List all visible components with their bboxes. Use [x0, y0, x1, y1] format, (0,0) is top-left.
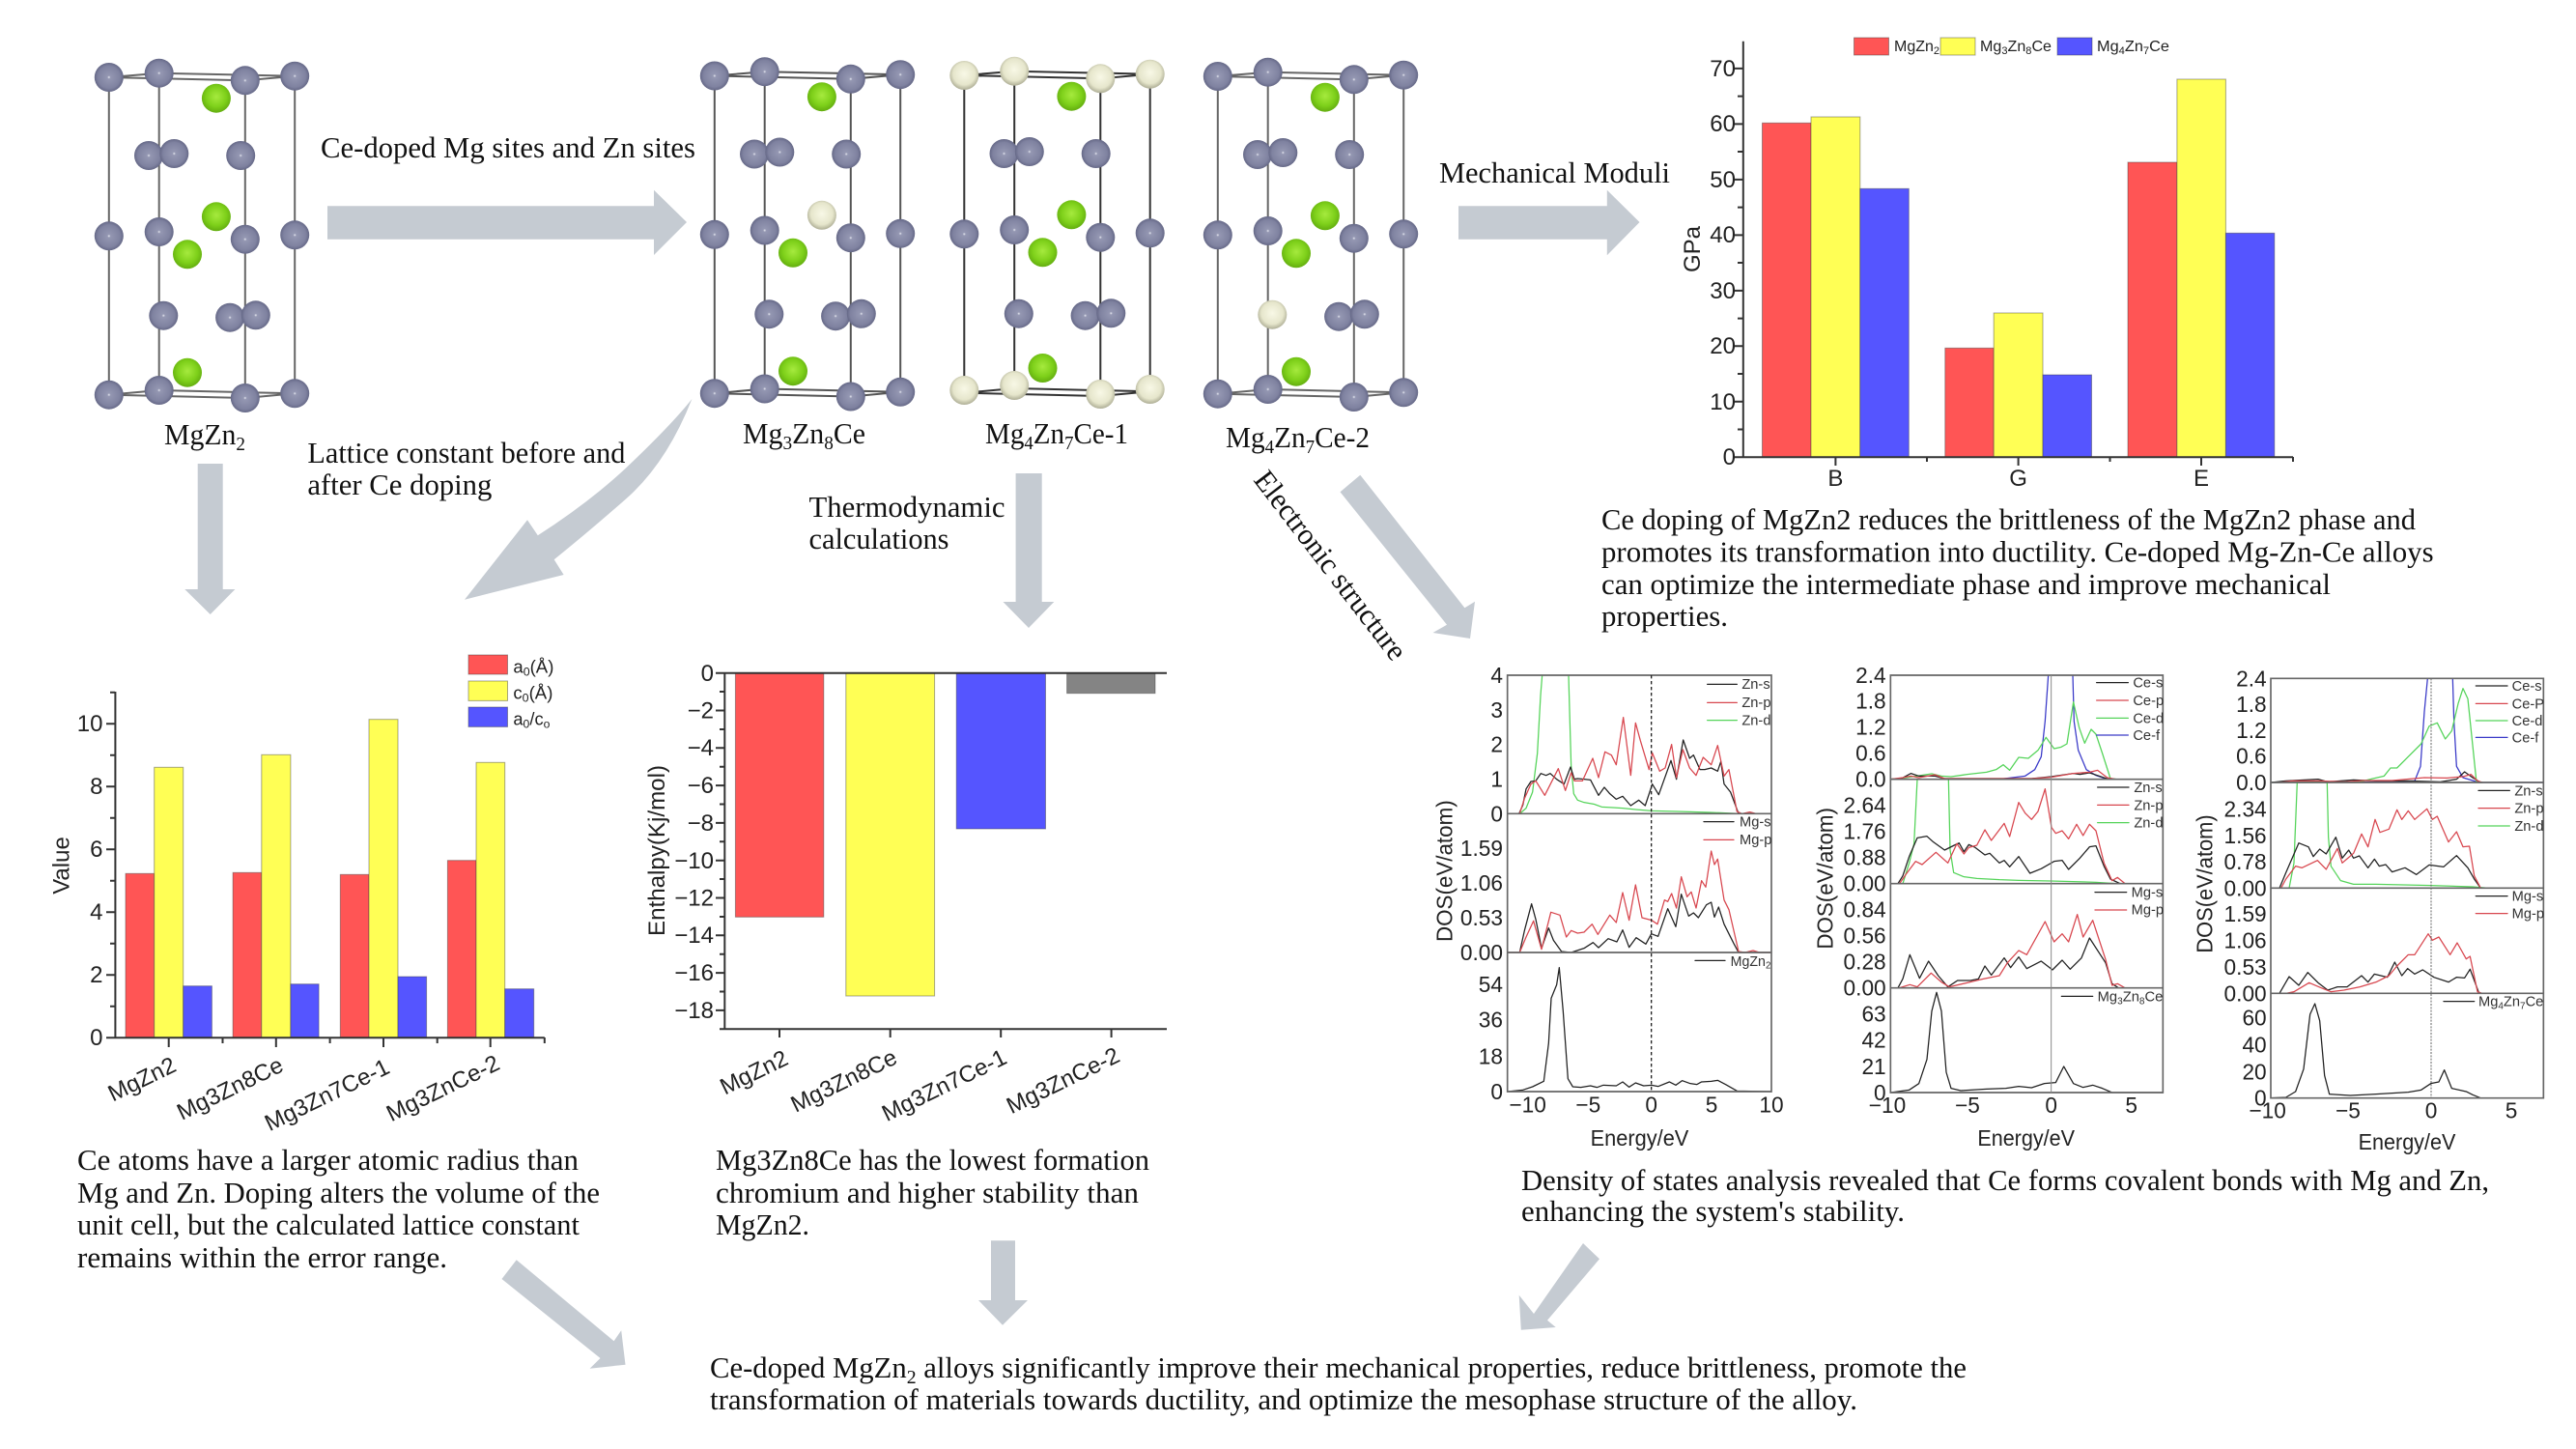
axes [716, 673, 1167, 1037]
y tick labels: 36 [1479, 1008, 1503, 1033]
y tick labels: 18 [1479, 1043, 1503, 1068]
y tick labels: 2 [1490, 732, 1503, 757]
panel curve: total [1508, 968, 1771, 1092]
legends: Zn [2504, 995, 2520, 1010]
text block: enthalpy conclusion [716, 1143, 1149, 1241]
x tick labels: E [2194, 466, 2209, 492]
DOS chart: MgZn2 [1431, 663, 1784, 1151]
bars [735, 673, 1155, 996]
x tick labels [1869, 1093, 2137, 1118]
y tick labels: 0.88 [1844, 844, 1886, 869]
text block: overall conclusion: alloys significantly improve their mechanical properties, reduce brittleness, promote the [917, 1350, 1967, 1384]
arrow: DOS text to conclusion [1519, 1243, 1599, 1330]
arrow: diagonal to DOS charts [1341, 475, 1475, 639]
label: Mg3Zn8Ce: Zn [792, 416, 825, 450]
legends: Mg-p [1740, 833, 1771, 848]
caption: lattice constant: after Ce doping [307, 468, 492, 501]
axes [106, 692, 545, 1047]
label: MgZn2: MgZn [164, 417, 240, 451]
text block: enthalpy conclusion: Mg3Zn8Ce has the lowest formation [716, 1143, 1149, 1177]
text block: density of states: Density of states analysis revealed that Ce forms covalent bonds with Mg and Zn, [1521, 1163, 2489, 1197]
x tick labels: Mg3Zn7Ce-1 [878, 1044, 1011, 1127]
label: Mg4Zn7Ce-1: 4 [1024, 433, 1033, 454]
legend: Mg [1980, 39, 2001, 55]
y tick labels: 1.56 [2224, 823, 2267, 848]
y tick labels: 1.8 [2236, 692, 2267, 717]
y tick labels: 1.2 [1855, 715, 1886, 740]
legend: (Å) [530, 657, 553, 676]
label: Mg4Zn7Ce-1: Zn [1033, 416, 1065, 450]
text block: lattice conclusion: Ce atoms have a larger atomic radius than [77, 1143, 579, 1177]
text block: mechanical conclusion: Ce doping of MgZn2 reduces the brittleness of the MgZn2 phase and [1601, 502, 2416, 536]
legends: Ce-P [2512, 696, 2544, 712]
y tick labels: 2 [90, 962, 102, 988]
panel curves: Mg [2279, 934, 2482, 993]
y tick labels: 0.00 [1844, 976, 1886, 1001]
y tick labels: 20 [1710, 333, 1736, 359]
legend [468, 655, 553, 730]
x tick labels: 5 [1706, 1092, 1717, 1117]
y axis title: DOS(eV/atom) [2193, 814, 2218, 953]
label: Mg4Zn7Ce-2: 7 [1306, 437, 1315, 458]
legends: Zn-s [2134, 781, 2163, 796]
x tick labels: 5 [2505, 1097, 2517, 1122]
y axis title: Enthalpy(Kj/mol) [644, 765, 670, 936]
Fermi level [2429, 678, 2432, 1098]
caption: thermodynamic calculations: calculations [809, 522, 948, 555]
crystal structure: Mg4Zn7Ce-1 [949, 57, 1165, 409]
legend: (Å) [529, 684, 552, 703]
x tick labels: Mg3Zn7Ce-1 [261, 1054, 394, 1137]
y tick labels: 0 [90, 1025, 102, 1051]
label: Mg4Zn7Ce-1: Mg [985, 416, 1027, 450]
x tick labels [104, 1050, 504, 1137]
x tick labels: −5 [1955, 1093, 1980, 1118]
x tick labels [1509, 1092, 1784, 1117]
crystal structure: Mg3Zn8Ce [700, 57, 915, 411]
x tick labels: Mg3ZnCe-2 [382, 1050, 504, 1127]
y tick labels: 1.76 [1844, 818, 1886, 843]
legend: Zn [2125, 39, 2143, 55]
legend: 0 [524, 665, 530, 678]
y tick labels: −18 [674, 998, 714, 1024]
y tick labels: 0.00 [1844, 871, 1886, 896]
crystal structure: MgZn2 [95, 59, 309, 412]
legends: Zn-d [2134, 816, 2163, 832]
x tick labels: Mg3Zn8Ce [787, 1044, 901, 1118]
label: Mg3Zn8Ce: 3 [782, 433, 792, 454]
text block: mechanical conclusion [1601, 502, 2434, 633]
y tick labels: 0.6 [1855, 740, 1886, 765]
legend: Ce [2031, 39, 2052, 55]
y tick labels: 42 [1861, 1028, 1886, 1053]
legend: 2 [1934, 45, 1939, 57]
legends: 7 [2520, 1001, 2526, 1011]
y tick labels [2224, 666, 2267, 1111]
y tick labels: 2.4 [2236, 666, 2267, 691]
bars: Mg3ZnCe-2 [447, 762, 534, 1037]
label: Mg3Zn8Ce: Ce [834, 416, 865, 450]
text block: mechanical conclusion: properties. [1601, 599, 1728, 633]
panel curves: Zn [2271, 782, 2543, 888]
panel curves: Mg [1508, 851, 1771, 952]
x axis title: Energy/eV [2359, 1129, 2456, 1154]
label: Mg3Zn8Ce: Mg [743, 416, 784, 450]
text block: lattice conclusion: remains within the error range. [77, 1240, 447, 1274]
legends: MgZn [1731, 954, 1767, 970]
frame [1890, 675, 2163, 1093]
y tick labels: −12 [674, 885, 714, 912]
y tick labels: 0 [1723, 444, 1736, 470]
frame [1508, 675, 1771, 1092]
y tick labels: −8 [688, 810, 714, 837]
bars: G [1945, 313, 2092, 457]
bar chart: lattice constants [48, 655, 553, 1137]
legends: Ce-f [2512, 730, 2539, 746]
axes [1734, 42, 2293, 466]
legend: 4 [2119, 45, 2125, 57]
caption: lattice constant [307, 436, 626, 501]
panel curves: Zn [1890, 780, 2163, 884]
legends: 3 [2117, 996, 2123, 1007]
y tick labels: 4 [90, 899, 102, 925]
y tick labels: 1 [1490, 767, 1503, 792]
frame [2271, 678, 2543, 1098]
label: Mg4Zn7Ce-2: 4 [1265, 437, 1274, 458]
label: Mg4Zn7Ce-2: Mg [1226, 420, 1267, 454]
y tick labels: 0.00 [2224, 980, 2267, 1006]
x tick labels: −5 [1575, 1092, 1600, 1117]
x tick labels: −5 [2335, 1097, 2361, 1122]
y tick labels [1460, 663, 1503, 1104]
arrow: to doped structures [327, 190, 687, 255]
text block: enthalpy conclusion: MgZn2. [716, 1208, 809, 1241]
y axis title: GPa [1680, 225, 1706, 272]
caption: lattice constant: Lattice constant before and [307, 436, 626, 469]
arrow: down to enthalpy chart [1003, 473, 1054, 628]
y tick labels: 1.59 [1460, 836, 1503, 861]
x tick labels: Mg3ZnCe-2 [1003, 1042, 1124, 1120]
legend: 8 [2025, 45, 2031, 57]
panel curves: Ce [2271, 678, 2543, 782]
legends: Zn [2123, 990, 2139, 1006]
caption: mechanical moduli: Mechanical Moduli [1439, 156, 1670, 189]
y tick labels: 1.8 [1855, 689, 1886, 714]
y tick labels: 30 [1710, 278, 1736, 304]
x tick labels: G [2009, 466, 2027, 492]
panel curves: Zn [1508, 675, 1771, 813]
legends: Zn-d [2514, 819, 2543, 835]
arrow: down from MgZn2 [184, 464, 235, 614]
legends [1695, 677, 1771, 972]
legend: 7 [2143, 45, 2149, 57]
bar chart: mechanical moduli [1680, 38, 2293, 492]
y tick labels: 0 [1874, 1080, 1886, 1105]
label: Mg4Zn7Ce-2: Ce-2 [1315, 420, 1370, 454]
arrow: lattice text to conclusion [502, 1260, 626, 1369]
arrow: enthalpy text to conclusion [978, 1240, 1028, 1325]
legends: 2 [1766, 961, 1771, 972]
bars: B [1762, 117, 1909, 457]
text block: lattice conclusion: Mg and Zn. Doping alters the volume of the [77, 1176, 600, 1209]
x tick labels: 10 [1759, 1092, 1784, 1117]
x tick labels: 0 [2045, 1093, 2057, 1118]
text block: mechanical conclusion: can optimize the intermediate phase and improve mechanical [1601, 567, 2331, 601]
y tick labels: 0.84 [1844, 896, 1886, 922]
y tick labels: 4 [1490, 663, 1503, 688]
legend: o [544, 717, 551, 730]
y axis title: DOS(eV/atom) [1431, 800, 1457, 942]
y tick labels: 0.78 [2224, 849, 2267, 874]
legends: Mg-s [1740, 814, 1771, 830]
legend: 0 [523, 692, 529, 705]
x axis title: Energy/eV [1591, 1125, 1689, 1151]
y tick labels: 0 [1490, 801, 1503, 826]
legends: Zn-p [2134, 798, 2163, 813]
y tick labels: 2.64 [1844, 792, 1886, 817]
legend: MgZn [1894, 39, 1934, 55]
y axis title: DOS(eV/atom) [1812, 808, 1837, 950]
bars: E [2128, 79, 2275, 457]
legends: 8 [2139, 996, 2145, 1007]
y tick labels: −2 [688, 697, 714, 724]
legend: Zn [2008, 39, 2025, 55]
arrow: curved to lattice chart [465, 399, 692, 600]
y tick labels: 0.0 [2236, 770, 2267, 795]
legend: Mg [2097, 39, 2118, 55]
y tick labels: 1.06 [2224, 927, 2267, 952]
y tick labels: 10 [1710, 389, 1736, 415]
label: Mg4Zn7Ce-1: Ce-1 [1073, 416, 1128, 450]
y tick labels: −6 [688, 773, 714, 799]
x tick labels: 0 [2425, 1097, 2437, 1122]
y tick labels: 2.34 [2224, 797, 2267, 822]
legends [2444, 679, 2544, 1011]
y tick labels: −10 [674, 848, 714, 874]
legends: Mg-p [2512, 906, 2544, 922]
legends: Zn-s [2514, 783, 2543, 799]
y tick labels: 54 [1479, 972, 1503, 997]
y tick labels: 0.28 [1844, 950, 1886, 975]
y tick labels: 20 [2242, 1059, 2267, 1084]
legend: a [513, 657, 523, 676]
y tick labels: −16 [674, 960, 714, 986]
crystal structure: Mg4Zn7Ce-2 [1203, 58, 1418, 412]
x tick labels: B [1827, 466, 1843, 492]
bar chart: enthalpy [644, 661, 1167, 1127]
label: Mg4Zn7Ce-2: Zn [1274, 420, 1306, 454]
text block: enthalpy conclusion: chromium and higher stability than [716, 1176, 1139, 1209]
text block: density of states [1521, 1163, 2489, 1228]
legends: Mg-s [2512, 889, 2543, 904]
caption: thermodynamic calculations: Thermodynamic [809, 490, 1005, 524]
legends: Mg [2478, 995, 2498, 1010]
panel curve: total [2271, 1004, 2543, 1098]
y tick labels: 0.00 [2224, 875, 2267, 900]
y tick labels: 1.2 [2236, 718, 2267, 743]
y tick labels: 0 [1490, 1079, 1503, 1104]
x tick labels: 5 [2125, 1093, 2137, 1118]
text block: overall conclusion: transformation of materials towards ductility, and optimize the mesophase structure of the alloy. [710, 1382, 1857, 1416]
text block: overall conclusion: Ce-doped MgZn [710, 1350, 909, 1384]
y tick labels: 0 [2254, 1086, 2267, 1111]
legends: Ce [2144, 990, 2163, 1006]
legend [1854, 38, 2169, 57]
legends: Zn-p [1741, 696, 1770, 711]
legends: Ce-p [2133, 694, 2164, 709]
y tick labels: 8 [90, 774, 102, 800]
y tick labels: 60 [1710, 111, 1736, 137]
text block: density of states: enhancing the system's stability. [1521, 1194, 1905, 1228]
y tick labels: 40 [1710, 222, 1736, 248]
x tick labels: −10 [1869, 1093, 1906, 1118]
legend: c [513, 684, 522, 703]
legends: Ce [2526, 995, 2543, 1010]
y tick labels: 21 [1861, 1054, 1886, 1079]
y tick labels: 63 [1861, 1001, 1886, 1026]
x tick labels [1827, 466, 2209, 492]
legend: Ce [2149, 39, 2169, 55]
y tick labels [1710, 56, 1736, 470]
DOS chart: Mg3Zn8Ce [1812, 663, 2164, 1151]
y tick labels: 0.56 [1844, 923, 1886, 948]
text block: lattice conclusion [77, 1143, 600, 1274]
legend: 0 [524, 717, 530, 730]
y axis title: Value [48, 837, 75, 895]
text block: overall conclusion: 2 [907, 1367, 917, 1388]
y tick labels: 6 [90, 837, 102, 863]
label: Mg3Zn8Ce: 8 [824, 433, 834, 454]
y tick labels: 0.00 [1460, 940, 1503, 965]
legends: Zn-s [1741, 677, 1770, 693]
legends: 4 [2498, 1001, 2504, 1011]
caption: electronic structure: Electronic structure [1247, 464, 1414, 667]
x tick labels: MgZn2 [716, 1045, 792, 1100]
legends: Ce-d [2133, 711, 2164, 726]
caption: Ce-doped sites: Ce-doped Mg sites and Zn sites [321, 130, 695, 164]
bars: Mg3Zn7Ce-1 [340, 720, 427, 1037]
x tick labels: 0 [1645, 1092, 1657, 1117]
y tick labels: 0.53 [2224, 954, 2267, 980]
legends: Ce-f [2133, 728, 2161, 744]
text block: lattice conclusion: unit cell, but the calculated lattice constant [77, 1208, 580, 1241]
y tick labels [77, 711, 102, 1051]
x tick labels: −10 [2249, 1097, 2286, 1122]
legend: a [513, 709, 523, 728]
y tick labels: 3 [1490, 697, 1503, 723]
caption: thermodynamic calculations [809, 490, 1005, 555]
y tick labels: 2.4 [1855, 663, 1886, 688]
x tick labels: −10 [1509, 1092, 1546, 1117]
panel curves: Ce [1890, 675, 2163, 780]
legend: /c [529, 709, 544, 728]
text block: mechanical conclusion: promotes its transformation into ductility. Ce-doped Mg-Zn-Ce alloys [1601, 535, 2434, 569]
legends: Mg-s [2132, 885, 2163, 900]
y tick labels: −4 [688, 735, 714, 761]
legends [2061, 676, 2164, 1007]
bars: MgZn2 [126, 767, 212, 1037]
y tick labels: 10 [77, 711, 102, 737]
bars: Mg3Zn8Ce [233, 754, 319, 1037]
x tick labels [2249, 1097, 2517, 1122]
y tick labels [674, 661, 714, 1024]
legends: Zn-p [2514, 802, 2543, 817]
y tick labels: 40 [2242, 1033, 2267, 1058]
panel curves: Mg [1898, 915, 2125, 988]
arrow: to mechanical chart [1458, 190, 1640, 255]
x axis title: Energy/eV [1977, 1125, 2076, 1151]
x tick labels [716, 1042, 1124, 1127]
label: MgZn2: 2 [236, 434, 245, 455]
panel curve: total [1890, 992, 2163, 1093]
DOS chart: Mg4Zn7Ce [2193, 666, 2544, 1154]
label: Mg4Zn7Ce-1: 7 [1064, 433, 1073, 454]
text block: overall conclusion [710, 1350, 1967, 1416]
y tick labels: 0.0 [1855, 767, 1886, 792]
legends: Ce-d [2512, 714, 2542, 729]
x tick labels: MgZn2 [104, 1052, 181, 1107]
legends: Mg [2098, 990, 2117, 1006]
legends: Ce-s [2133, 676, 2163, 692]
y tick labels [1844, 663, 1886, 1105]
y tick labels: 0.53 [1460, 905, 1503, 930]
y tick labels: 1.59 [2224, 901, 2267, 926]
y tick labels: 50 [1710, 167, 1736, 193]
legends: Zn-d [1741, 713, 1770, 728]
y tick labels: 0.6 [2236, 744, 2267, 769]
legend: 3 [2001, 45, 2008, 57]
Fermi level [1650, 675, 1654, 1092]
legends: Mg-p [2132, 903, 2164, 919]
Fermi level [2050, 675, 2052, 1093]
x tick labels: Mg3Zn8Ce [173, 1052, 288, 1125]
legends: Ce-s [2512, 679, 2542, 695]
y tick labels: −14 [674, 923, 714, 949]
y tick labels: 70 [1710, 56, 1736, 82]
y tick labels: 60 [2242, 1005, 2267, 1030]
y tick labels: 1.06 [1460, 870, 1503, 895]
y tick labels: 0 [701, 661, 714, 687]
